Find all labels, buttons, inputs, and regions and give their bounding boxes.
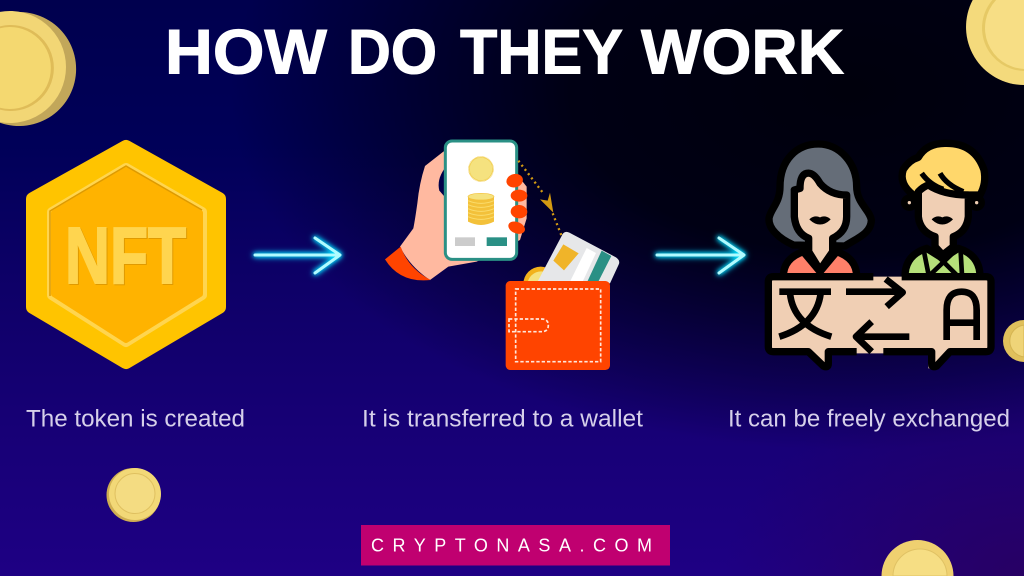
- coin on screen: [469, 157, 493, 181]
- sleeve: [385, 247, 431, 280]
- illustration: wallet with card: [506, 232, 619, 370]
- icon: NFT hexagon token: [33, 147, 219, 362]
- title: DO: [348, 18, 437, 88]
- coin: right edge: [1003, 320, 1024, 362]
- illustration: hand holding phone: [385, 141, 528, 280]
- card chip: [553, 244, 579, 270]
- wallet clasp: [509, 319, 548, 332]
- caption: step 2: It is transferred to a wallet: [362, 406, 643, 432]
- exchange arrows: [846, 279, 909, 352]
- dotted transfer arrow: [518, 161, 562, 236]
- card: [537, 232, 619, 283]
- arrow: token to wallet: [255, 238, 340, 273]
- glyph: 文: [779, 292, 831, 337]
- illustration: two people exchanging: [767, 143, 993, 368]
- card teal stripe: [587, 251, 611, 282]
- title: [165, 18, 844, 88]
- coin stack: [468, 193, 494, 225]
- footer banner: [361, 525, 670, 566]
- card white stripe: [570, 248, 596, 282]
- title: HOW: [165, 18, 328, 88]
- wallet body: [506, 281, 610, 370]
- NFT lettering: NFT: [65, 211, 186, 300]
- glyph: A: [947, 292, 977, 340]
- teal button: [487, 237, 507, 246]
- hand: [400, 150, 527, 280]
- title: THEY: [460, 18, 623, 88]
- man: [902, 143, 985, 277]
- phone: [445, 141, 517, 259]
- speech bubble: [767, 277, 993, 368]
- arrow: wallet to exchange: [657, 238, 744, 273]
- footer URL: CRYPTONASA.COM: [371, 536, 652, 556]
- coin: top left: [0, 11, 76, 126]
- title: WORK: [641, 18, 844, 88]
- coin: top right: [966, 0, 1024, 85]
- fingernails: [505, 172, 528, 236]
- caption: step 3: It can be freely exchanged: [728, 406, 1010, 432]
- wallet stitching: [516, 289, 601, 362]
- bubble outline: [768, 277, 991, 367]
- gold coin behind wallet: [523, 267, 558, 301]
- woman: [769, 144, 871, 277]
- thumb gap: [439, 169, 444, 196]
- gray button: [455, 237, 475, 246]
- coin: bottom: [882, 540, 954, 576]
- caption: step 1: The token is created: [26, 406, 245, 432]
- coin: bottom left: [106, 468, 161, 522]
